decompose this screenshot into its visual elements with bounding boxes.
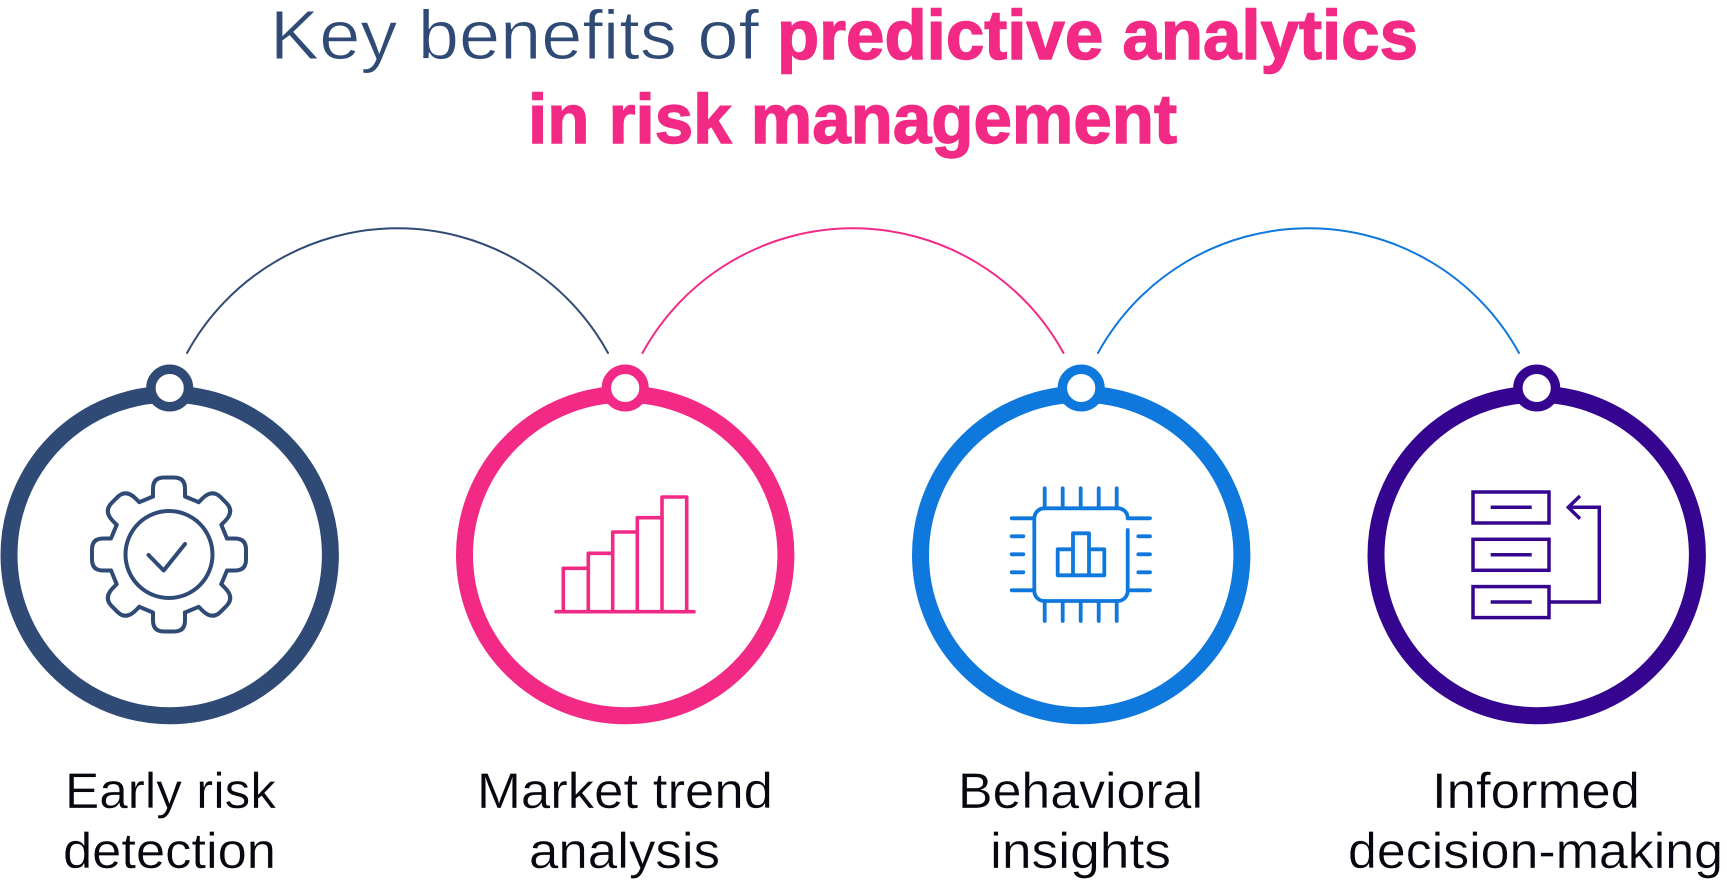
label: Early risk [65,763,277,819]
icon: gear with check [92,478,246,632]
label [1348,763,1723,879]
label [958,763,1203,879]
arc connector: blue [1098,228,1519,353]
icon: chip with bars [1012,488,1150,621]
panel: market trend analysis [464,369,786,879]
icon: bar chart [556,497,694,612]
label: Behavioral [958,763,1203,819]
icon: process list with return arrow [1473,492,1599,618]
label: detection [63,823,276,879]
arc connector: pink [642,228,1064,353]
ring [9,369,330,716]
label: Market trend [477,763,773,819]
label [63,763,277,879]
label: insights [990,823,1171,879]
ring [920,369,1242,716]
title: in risk management [528,80,1177,158]
panel: behavioral insights [920,369,1242,879]
ring [1376,369,1697,716]
panel: early risk detection [9,369,330,879]
label [477,763,773,879]
label: Informed [1432,763,1640,819]
arc connector: navy [187,228,608,353]
label: decision-making [1348,823,1723,879]
label: analysis [529,823,720,879]
title [270,0,1418,158]
ring [464,369,786,716]
panel: informed decision-making [1348,369,1723,879]
